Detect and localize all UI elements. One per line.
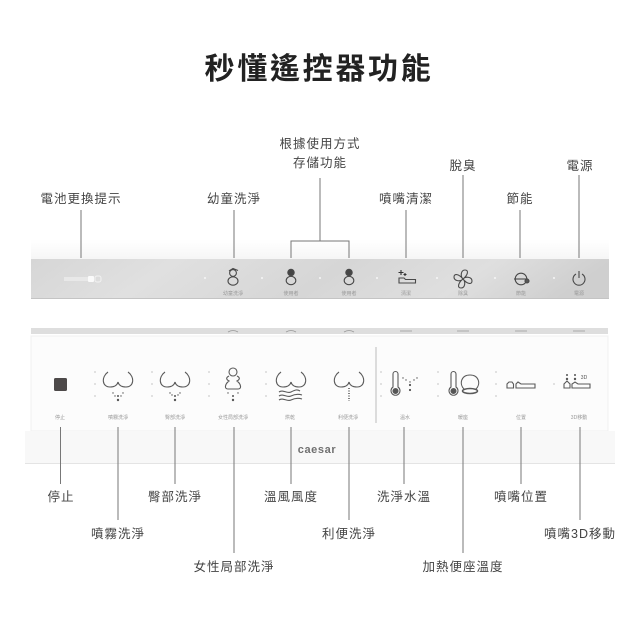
lower labels: 女性局部洗淨 (193, 559, 275, 574)
reflected icon tops (228, 330, 585, 332)
icon: child (228, 268, 238, 285)
indicator dots (204, 277, 555, 279)
icon: stop (54, 378, 67, 391)
icon: heated seat (449, 372, 479, 395)
tiny button captions: 節能 (516, 290, 526, 297)
upper labels: 脫臭 (449, 158, 477, 173)
tiny button captions: 臀部洗淨 (165, 414, 185, 421)
lower labels: 噴嘴3D移動 (544, 527, 616, 541)
tiny button captions: 電源 (574, 290, 584, 297)
tiny button captions: 噴霧洗淨 (108, 414, 128, 421)
icon: user 2 (344, 269, 354, 285)
lower labels: 洗淨水溫 (377, 490, 431, 504)
icon: warm air dry (276, 372, 306, 400)
icon: hip wash (160, 372, 190, 401)
brand logo: caesar (298, 444, 336, 456)
icon: nozzle position (507, 382, 535, 388)
icon: 3D nozzle move (564, 374, 590, 388)
tiny button captions: 溫水 (400, 414, 410, 421)
indicator: battery lights (64, 276, 101, 282)
tiny button captions: 暖座 (458, 414, 468, 421)
icon: spray wash (103, 372, 133, 401)
tiny button captions: 清潔 (401, 290, 411, 297)
upper labels (40, 136, 594, 206)
upper labels: 節能 (506, 191, 534, 206)
icon: user 1 (286, 269, 296, 285)
tiny button captions: 除臭 (458, 290, 468, 297)
lower labels: 噴嘴位置 (494, 489, 548, 504)
tiny button captions: 女性局部洗淨 (218, 414, 248, 421)
tiny button captions: 幼童洗淨 (223, 290, 243, 297)
icon: water temperature (391, 372, 418, 395)
tiny button captions: 利便洗淨 (338, 414, 358, 421)
tiny button captions (223, 290, 584, 297)
tiny button captions: 使用者 (341, 290, 357, 297)
panel: lower remote body (25, 328, 615, 464)
lower labels: 噴霧洗淨 (91, 527, 145, 541)
title: 秒懂遙控器功能 (205, 53, 433, 86)
icon: nozzle clean (398, 270, 416, 283)
tiny button captions: 位置 (516, 414, 526, 421)
icon: energy saving (514, 273, 529, 285)
lower labels: 利便洗淨 (322, 527, 376, 541)
tiny button captions: 烘乾 (285, 414, 295, 421)
icon: power (573, 271, 585, 285)
tiny button captions: 使用者 (283, 290, 299, 297)
lower labels (47, 489, 616, 574)
lower labels: 溫風風度 (264, 489, 318, 504)
upper labels: 電池更換提示 (40, 191, 122, 206)
icon: feminine stream wash (334, 372, 364, 401)
upper labels: 電源 (566, 159, 594, 173)
indicator dots (94, 371, 555, 397)
tiny button captions: 停止 (55, 414, 65, 421)
icon: fan (454, 270, 472, 288)
upper labels: 根據使用方式 (279, 136, 361, 151)
upper labels: 幼童洗淨 (207, 191, 261, 206)
lower labels: 停止 (47, 489, 75, 504)
upper labels: 噴嘴清潔 (379, 192, 433, 206)
leader lines: lower labels (60, 427, 580, 553)
tiny button captions (55, 414, 587, 421)
lower labels: 加熱便座溫度 (422, 559, 504, 574)
panel: upper remote bar (31, 239, 609, 299)
tiny button captions: 3D移動 (571, 414, 587, 421)
lower labels: 臀部洗淨 (148, 489, 202, 504)
leader lines: upper labels (81, 175, 579, 258)
upper labels: 存儲功能 (293, 156, 347, 170)
icon: female wash (225, 368, 241, 401)
icon: 3D nozzle move: 3D (581, 375, 588, 381)
